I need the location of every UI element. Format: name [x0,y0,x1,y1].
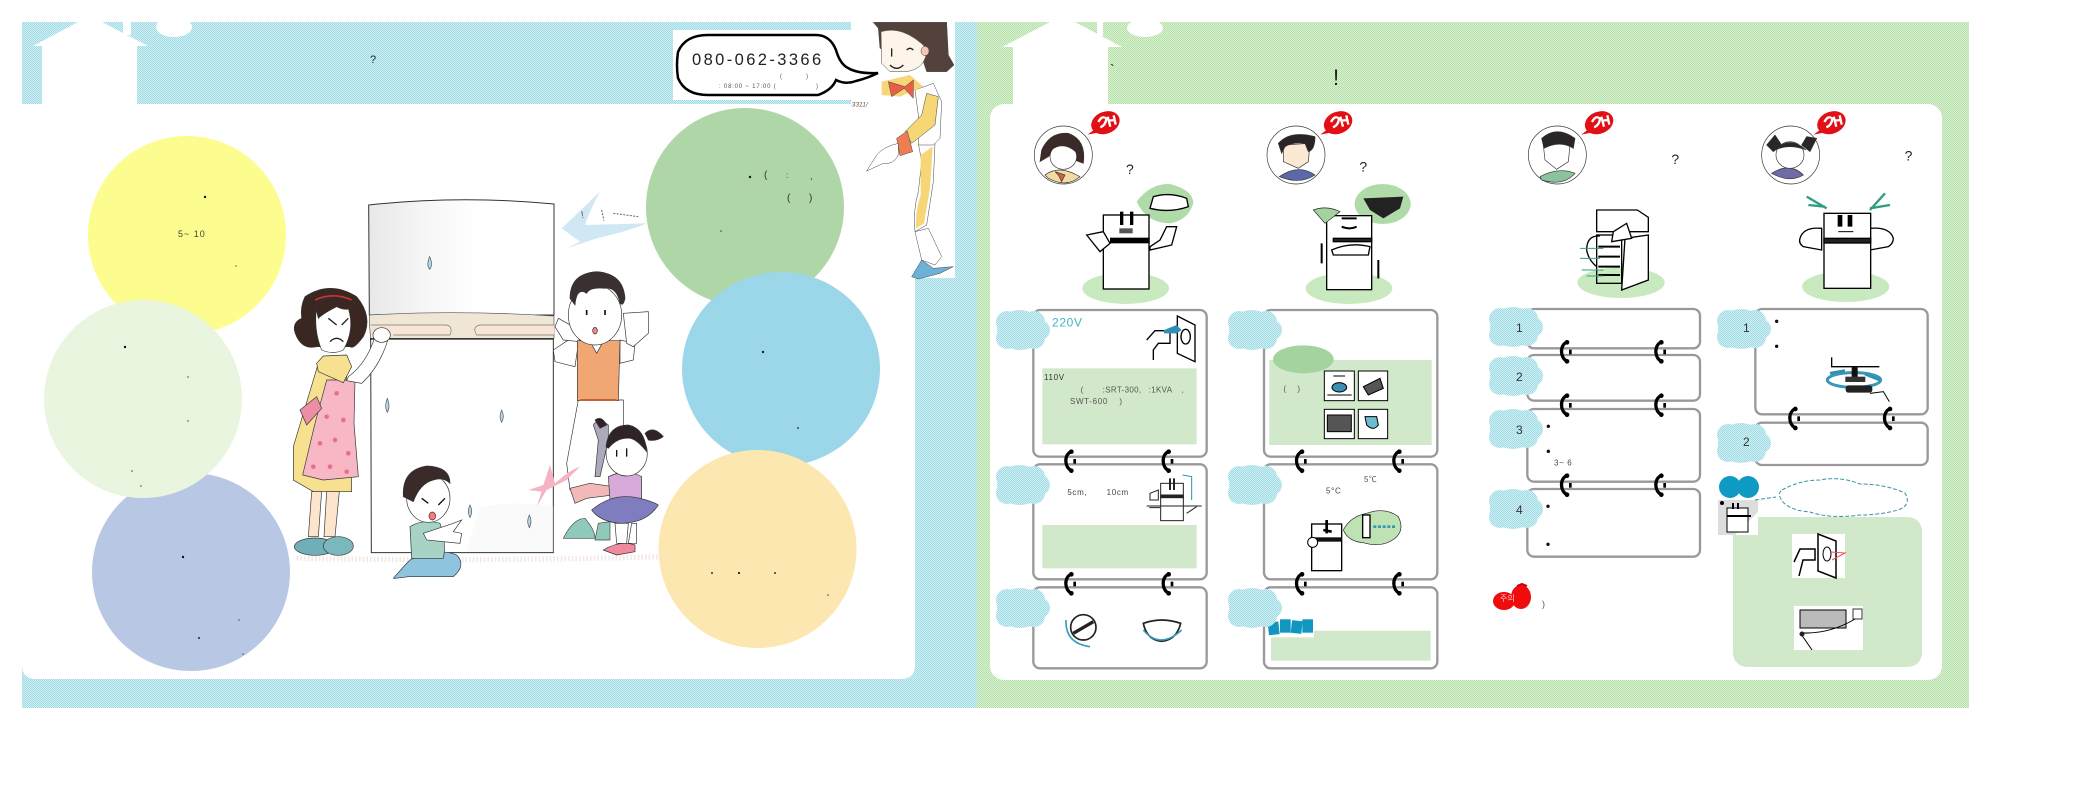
badge [1814,107,1849,138]
heading punctuation right: ` [1110,61,1115,77]
icon: red caution badge [1493,584,1545,610]
father slippers [563,518,610,540]
ground and bubble [1306,273,1392,304]
card 2: 5℃ [1364,475,1377,484]
callout: phone speech bubble: : 08:00 ~ 17:00 ( [719,84,776,90]
circle: pale yellow [88,136,286,334]
icon: red caution badge: 주의 [1500,593,1515,603]
circle: pale green [44,300,242,498]
fridge [1087,212,1177,289]
thumbnails [1324,371,1388,439]
callout: phone speech bubble [673,30,878,100]
icon: white house silhouette right [1002,19,1163,104]
column 3 header: face, badge and fridge [1528,107,1679,298]
card 2: 5cm, [1067,488,1087,497]
column 3 answer cards [1527,309,1700,557]
icon: white house silhouette left [33,17,192,104]
callout: phone speech bubble: ) [816,84,818,90]
small fridge [1718,500,1758,535]
circle: green: , [810,171,813,181]
circle: green: : [786,171,788,180]
bullets [1775,320,1778,348]
circle: pale yellow: 5~ 10 [178,229,206,239]
bullets and range text: 3~ 6 [1554,459,1572,468]
blue circles [1719,476,1741,498]
card 2: 10cm [1107,488,1129,497]
callout: phone speech bubble: ( [780,74,782,80]
binder rings [1561,340,1666,497]
circle: green: ( [764,170,768,181]
card 1 [1264,310,1437,457]
legs and slipper [914,143,935,232]
refrigerator [369,200,554,553]
card 1 [1033,310,1207,457]
speech burst [562,192,647,248]
speech burst: ! [580,210,585,221]
card 1: ( [1283,385,1286,394]
card 1: ) [1119,397,1122,406]
angry fridge [1800,213,1893,288]
card 1: :SRT-300, [1103,386,1141,395]
illustration: family around the refrigerator [293,192,663,578]
question mark: ? [1671,151,1679,167]
card 1: :1KVA [1149,386,1173,395]
question mark: ? [1126,161,1134,177]
ground [1577,267,1665,298]
badge [1581,107,1617,138]
question mark: ? [1905,148,1913,164]
binder rings [1296,449,1404,596]
label text: 3311/ [852,102,869,109]
tab numbers: 2 [1516,370,1523,384]
dashed cloud [1755,479,1907,516]
card 1: SWT-600 [1070,397,1108,406]
tab numbers: 3 [1516,423,1523,437]
portrait: boy [1528,126,1586,184]
tab numbers: 4 [1516,503,1523,517]
panel: green power note [1733,517,1922,667]
icon: levelling foot [1827,357,1889,402]
card 2 [1033,464,1207,579]
circle: green: ) [809,193,812,204]
white area behind pointing girl [851,22,955,278]
icon: plug and socket [1147,316,1195,362]
circle: periwinkle [92,473,290,671]
head [873,22,954,72]
card 1: ( [1081,386,1084,395]
tab numbers [1516,321,1750,517]
icon: dial [1066,615,1096,647]
badge [1320,107,1356,138]
open fridge [1587,210,1648,290]
circle: cyan [682,272,880,466]
callout: phone speech bubble: ) [806,74,808,80]
column 1 answer cards [1033,310,1207,668]
binder rings [1790,407,1895,430]
floor speckle [297,557,663,560]
tab numbers: 2 [1743,435,1750,449]
little girl [570,418,663,555]
card 3 [1264,587,1437,668]
portrait: father [1267,126,1325,184]
little boy [393,466,462,578]
panel: blue left background [22,22,978,708]
circle: pale orange [658,450,856,648]
tab numbers: 1 [1516,321,1523,335]
blue squares [1267,617,1314,637]
portrait: girl [1762,126,1820,184]
illustration: pointing girl [852,22,954,279]
badge [1088,107,1123,138]
callout: dashed cloud with blue circles and small fridge [1718,476,1907,535]
bullets and range text [1546,425,1572,546]
icon: fridge clearance [1147,475,1202,521]
icon: control knob [1143,620,1182,641]
question mark: ? [1359,159,1367,175]
card 3 [1033,587,1207,668]
white content area [22,104,915,679]
card 2 [1264,464,1437,579]
icon: red caution badge: ) [1542,599,1545,609]
card 1: 220V [1052,316,1083,330]
binder rings [1066,449,1173,596]
panel: green right background [977,22,1969,708]
mother [293,288,390,555]
father [553,272,648,490]
card 1: , [1182,386,1184,395]
portrait: mother [1034,126,1092,184]
heading punctuation right [1110,61,1339,90]
column 2 header: face, badge and fridge [1267,107,1411,304]
section tabs: cloud shaped labels [996,307,1771,628]
column 4 answer cards [1755,309,1928,465]
picture: machine bottom [1794,606,1863,650]
pink splash [528,465,580,507]
body [915,83,942,145]
phone number: 080-062-3366 [692,51,824,69]
icon: fridge with thermometer [1308,511,1401,571]
column 1 header: face, badge and fridge [1034,107,1193,304]
card 2: 5°C [1326,487,1341,496]
fridge [1322,216,1378,290]
ground [1802,271,1889,302]
card 1: 110V [1044,373,1065,382]
circle: green: ( [787,193,791,204]
heading punctuation right: ! [1333,65,1339,90]
heading question mark left: ? [370,54,376,66]
circle: green [646,108,844,306]
column 2 answer cards [1264,310,1437,668]
ground and bubble [1082,273,1169,304]
card 1: ) [1297,385,1300,394]
picture: plug and socket [1792,534,1845,578]
column 4 header: face, badge and fridge [1762,107,1913,302]
tab numbers: 1 [1743,321,1750,335]
